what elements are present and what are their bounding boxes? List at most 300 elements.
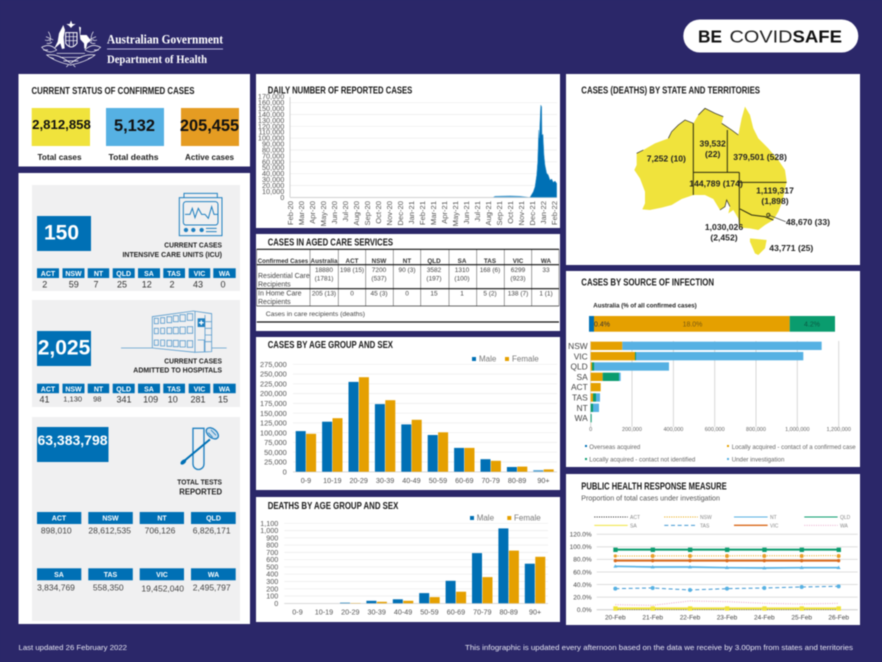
bar chart: cases by age: 60-69 xyxy=(455,476,473,485)
state values: tests: 2,495,797 xyxy=(193,583,231,593)
chart: daily cases: Dec-21 xyxy=(528,201,537,225)
heading: CURRENT STATUS OF CONFIRMED CASES xyxy=(32,86,195,97)
map labels: (1,898) xyxy=(761,196,789,206)
bar chart: cases by age: 40-49 xyxy=(402,476,421,485)
state header row: hospital: QLD xyxy=(116,386,131,393)
line chart: response: 21-Feb xyxy=(642,614,663,622)
bar chart: source by state: 200,000 xyxy=(622,427,642,433)
bar chart: deaths by age: 50-59 xyxy=(420,607,439,616)
panel: ICU, hospital and tests xyxy=(18,173,250,624)
bar chart: deaths by age: 20-29 xyxy=(341,607,359,616)
line chart: response: 120.0% xyxy=(570,532,592,539)
chart: daily cases: May-20 xyxy=(319,201,328,226)
table: aged care: 5 (2) xyxy=(483,290,497,297)
bar chart: cases by age: 30-39 xyxy=(376,476,394,485)
state values: hospital: 1,130 xyxy=(63,394,82,404)
state header rows: tests xyxy=(37,512,236,580)
bar chart: source by state: SA xyxy=(577,372,588,382)
chart: national stacked bar: 0.4% xyxy=(594,322,610,328)
table: aged care: (100) xyxy=(454,275,470,282)
legend: jurisdictions: NT xyxy=(770,515,777,521)
state values: tests xyxy=(37,525,231,594)
chart: daily cases: 0 xyxy=(280,193,284,202)
state header row: ICU: NT xyxy=(94,271,104,278)
bar chart: deaths by age: 70-79 xyxy=(473,607,491,616)
caption: tests xyxy=(177,480,222,496)
icon: hospital building xyxy=(121,311,227,352)
subheading: Proportion of total cases under investigation xyxy=(581,495,720,502)
bar chart: cases by age: 50-59 xyxy=(429,476,447,485)
line chart: response xyxy=(570,532,858,622)
heading: CASES BY SOURCE OF INFECTION xyxy=(581,277,714,288)
caption: hospital: ADMITTED TO HOSPITALS xyxy=(133,368,222,375)
legend: source: Under investigation xyxy=(732,457,785,464)
legend: jurisdictions xyxy=(594,515,851,529)
panel: aged care xyxy=(256,234,560,331)
state header row: hospital: NT xyxy=(94,386,104,393)
table: aged care: 33 xyxy=(542,267,550,274)
bar chart: deaths by age: 600 xyxy=(266,555,278,564)
state header row: ICU: ACT xyxy=(41,271,56,278)
bar chart: cases by age: 50,000 xyxy=(264,448,287,457)
state header rows: tests: VIC xyxy=(156,572,168,579)
line chart: response: 40.0% xyxy=(573,582,592,589)
state header row: hospital: TAS xyxy=(167,386,181,393)
state header rows: tests: ACT xyxy=(52,516,67,523)
state values: ICU: 0 xyxy=(220,280,226,290)
bar chart: cases by age: 80-89 xyxy=(508,476,526,485)
icon: ICU monitor xyxy=(179,193,222,236)
line chart: response: 25-Feb xyxy=(791,614,812,622)
state header rows: tests: SA xyxy=(54,572,64,579)
legend: source xyxy=(585,444,856,464)
bar chart: source by state: VIC xyxy=(574,351,588,361)
line chart: response: 20-Feb xyxy=(605,614,626,622)
chart: daily cases: Apr-20 xyxy=(308,201,317,224)
text: Department of Health: Department of Health xyxy=(107,52,207,66)
heading: CASES (DEATHS) BY STATE AND TERRITORIES xyxy=(581,86,760,97)
legend: Male xyxy=(477,513,495,522)
chart: daily cases: 110,000 xyxy=(258,128,284,137)
map: Australia xyxy=(634,107,787,255)
map labels: 1,030,026 xyxy=(705,222,743,232)
bar chart: cases by age: 0-9 xyxy=(301,476,311,485)
bar chart: deaths by age: 400 xyxy=(266,570,278,579)
bar chart: cases by age: 25,000 xyxy=(264,458,287,467)
table: aged care: 168 (6) xyxy=(480,267,500,274)
map labels: (22) xyxy=(705,149,720,159)
legend: jurisdictions: ACT xyxy=(630,515,640,521)
table: aged care: Residential Care xyxy=(258,273,310,280)
caption: ICU: INTENSIVE CARE UNITS (ICU) xyxy=(122,252,222,259)
table: aged care: 138 (7) xyxy=(508,290,528,297)
legend: source: Locally acquired - contact of a confirmed case xyxy=(732,444,856,451)
bar chart: deaths by age: 0 xyxy=(274,599,278,608)
stat: total cases: Total cases xyxy=(38,153,82,162)
stat: hospital cases: 2,025 xyxy=(38,336,91,359)
bar chart: deaths by age: 700 xyxy=(266,548,278,557)
table: aged care: SA xyxy=(458,258,467,265)
chart: daily cases: Jun-21 xyxy=(462,201,471,224)
stat: total tests xyxy=(37,427,108,462)
bar chart: deaths by age: 300 xyxy=(266,577,278,586)
stat: total deaths: Total deaths xyxy=(108,153,159,162)
state values: tests: 558,350 xyxy=(93,583,124,593)
heading: PUBLIC HEALTH RESPONSE MEASURE xyxy=(581,481,727,492)
chart: national stacked bar: 4.2% xyxy=(804,322,820,328)
state values: tests: 6,826,171 xyxy=(193,525,231,535)
legend: jurisdictions: TAS xyxy=(700,523,710,529)
stat: ICU cases: 150 xyxy=(44,222,79,244)
chart: daily cases: 120,000 xyxy=(258,122,284,131)
legend: source: Overseas acquired xyxy=(589,444,641,451)
footer: update note: This infographic is updated every afternoon based on the data we receive by 3.00pm from states and territories xyxy=(465,643,853,652)
panel: public health response xyxy=(566,474,860,625)
chart: daily cases: Aug-21 xyxy=(484,201,493,226)
panel: deaths by age xyxy=(256,497,560,622)
stat: active cases xyxy=(180,108,239,162)
table: aged care: VIC xyxy=(513,258,524,265)
state header row: hospital: VIC xyxy=(194,386,205,393)
chart: daily cases: Nov-21 xyxy=(517,201,526,225)
bar chart: source by state: NSW xyxy=(568,341,588,351)
table: aged care: NT xyxy=(403,258,411,265)
chart: national stacked bar xyxy=(589,316,835,332)
line chart: response: 23-Feb xyxy=(717,614,738,622)
chart: daily cases: 50,000 xyxy=(262,163,284,172)
chart: daily cases: 130,000 xyxy=(258,116,284,125)
map labels: 48,670 (33) xyxy=(786,217,830,227)
bar chart: cases by age: 200,000 xyxy=(260,389,287,398)
state values: tests: 898,010 xyxy=(41,525,72,535)
line chart: response: 24-Feb xyxy=(754,614,775,622)
heading: CASES BY AGE GROUP AND SEX xyxy=(268,340,393,351)
caption: tests: REPORTED xyxy=(179,487,222,496)
table: aged care: In Home Care xyxy=(258,290,302,298)
table: aged care: WA xyxy=(541,258,552,265)
table: aged care: (923) xyxy=(510,275,526,282)
subheading: Australia (% of all confirmed cases) xyxy=(593,302,697,309)
line chart: response: 0.0% xyxy=(577,607,592,614)
table: aged care: 1310 xyxy=(455,267,470,274)
legend xyxy=(470,513,541,522)
state values: ICU: 12 xyxy=(142,280,152,290)
line chart: response: 100.0% xyxy=(570,544,592,551)
caption: hospital: CURRENT CASES xyxy=(164,358,222,365)
badge: Be CovidSafe: BE xyxy=(698,26,722,46)
chart: daily cases: Jan-22 xyxy=(539,201,548,224)
chart: daily cases: 160,000 xyxy=(258,98,284,107)
state values: ICU xyxy=(42,280,226,290)
table: aged care: Recipients xyxy=(258,282,291,288)
bar chart: source by state: 800,000 xyxy=(746,427,766,433)
state header row: hospital: ACT xyxy=(41,386,56,393)
state header row: ICU: SA xyxy=(144,271,154,278)
state values: tests: 28,612,535 xyxy=(88,525,131,535)
bar chart: source by state: 400,000 xyxy=(663,427,683,433)
caption: tests: TOTAL TESTS xyxy=(177,480,222,487)
map labels: 1,119,317 xyxy=(756,185,794,195)
bar chart: cases by age: 0 xyxy=(283,467,287,476)
chart: daily cases: Jul-21 xyxy=(473,201,482,222)
card: ICU xyxy=(32,185,240,291)
state values: hospital: 281 xyxy=(190,394,206,404)
table: aged care: 198 (15) xyxy=(340,267,364,274)
stat: total tests: 63,383,798 xyxy=(37,432,108,448)
state header rows: tests: WA xyxy=(208,572,219,579)
table: aged care: NSW xyxy=(372,258,386,265)
bar chart: deaths by age xyxy=(260,519,548,616)
line chart: response: 26-Feb xyxy=(828,614,849,622)
state header rows: tests: QLD xyxy=(206,516,221,523)
bar chart: cases by age: 20-29 xyxy=(350,476,368,485)
chart: daily cases: 170,000 xyxy=(258,92,284,101)
state header row: ICU: WA xyxy=(219,271,230,278)
panel: cases by age xyxy=(256,337,560,490)
bar chart: source by state: 1,200,000 xyxy=(826,427,851,433)
bar chart: cases by age: 275,000 xyxy=(260,360,287,369)
stat: ICU cases xyxy=(37,216,91,251)
state values: ICU: 7 xyxy=(93,280,99,290)
table: aged care: (1781) xyxy=(315,275,333,282)
legend: jurisdictions: SA xyxy=(630,523,637,529)
legend xyxy=(472,355,539,364)
text: Australian Government: Australian Government xyxy=(107,32,224,46)
bar chart: source by state: 600,000 xyxy=(705,427,725,433)
stat: total deaths xyxy=(106,108,164,162)
heading: CASES IN AGED CARE SERVICES xyxy=(268,238,393,249)
legend: Male xyxy=(479,355,497,364)
legend: jurisdictions: VIC xyxy=(770,523,779,529)
state values: hospital: 41 xyxy=(39,394,50,404)
chart: national stacked bar: 18.0% xyxy=(683,322,702,328)
map labels: 39,532 xyxy=(700,138,726,148)
chart: daily cases: May-21 xyxy=(451,201,460,226)
state values: hospital: 15 xyxy=(218,394,228,404)
caption: ICU: CURRENT CASES xyxy=(164,243,222,250)
line chart: response: 22-Feb xyxy=(680,614,701,622)
bar chart: deaths by age: 60-69 xyxy=(447,607,465,616)
legend: source: Locally acquired - contact not identified xyxy=(589,457,696,464)
map labels: 43,771 (25) xyxy=(769,243,813,253)
badge: Be CovidSafe: COVID xyxy=(730,26,792,46)
state values: tests: 19,452,040 xyxy=(141,584,184,594)
chart: daily cases: Feb-22 xyxy=(550,201,559,225)
caption: hospital xyxy=(133,358,222,375)
bar chart: deaths by age: 30-39 xyxy=(368,607,386,616)
chart: daily cases: 40,000 xyxy=(262,169,284,178)
bar chart: source by state: ACT xyxy=(571,382,588,392)
chart: daily cases: Oct-21 xyxy=(506,201,515,224)
bar chart: cases by age: 100,000 xyxy=(260,428,287,437)
legend: jurisdictions: QLD xyxy=(840,515,851,521)
stat: total cases xyxy=(32,108,91,162)
state values: hospital: 10 xyxy=(168,394,178,404)
panel: source of infection xyxy=(566,271,860,467)
card: tests xyxy=(32,417,240,621)
stat: hospital cases xyxy=(37,331,91,366)
chart: daily cases: 150,000 xyxy=(258,104,284,113)
card: hospital xyxy=(32,300,240,407)
state values: hospital xyxy=(39,394,228,404)
bar chart: source by state xyxy=(568,341,851,433)
bar chart: cases by age: 90+ xyxy=(537,476,550,485)
state header row: ICU xyxy=(37,268,236,278)
chart: daily cases: Jul-20 xyxy=(341,201,350,222)
chart: daily cases xyxy=(258,92,559,226)
bar chart: deaths by age: 10-19 xyxy=(315,607,333,616)
chart: daily cases: 90,000 xyxy=(262,140,284,148)
table: aged care: Australia xyxy=(311,258,338,265)
table: aged care: 15 xyxy=(430,290,438,297)
icon: swab and test tube xyxy=(179,426,220,469)
bar chart: cases by age: 150,000 xyxy=(260,409,287,418)
table: aged care: Confirmed Cases xyxy=(258,258,309,265)
chart: daily cases: Feb-20 xyxy=(286,201,295,225)
bar chart: deaths by age: 90+ xyxy=(529,607,541,616)
legend: Female xyxy=(514,513,541,522)
badge: Be CovidSafe: SAFE xyxy=(792,26,842,46)
table: aged care: Recipients xyxy=(258,299,291,306)
map labels: 144,789 (174) xyxy=(689,178,743,188)
bar chart: source by state: NT xyxy=(577,403,588,413)
bar chart: deaths by age: 80-89 xyxy=(500,607,518,616)
chart: daily cases: Dec-20 xyxy=(396,201,405,225)
table: aged care: 6299 xyxy=(511,267,526,274)
bar chart: deaths by age: 900 xyxy=(266,533,278,542)
chart: daily cases: Aug-20 xyxy=(352,201,361,226)
chart: daily cases: 80,000 xyxy=(262,146,284,154)
bar chart: cases by age: 10-19 xyxy=(323,476,341,485)
state values: ICU: 2 xyxy=(169,280,175,290)
chart: daily cases: Sep-20 xyxy=(363,201,372,226)
stat: active cases: 205,455 xyxy=(180,117,239,135)
chart: daily cases: 100,000 xyxy=(258,134,284,143)
state values: tests: 706,126 xyxy=(145,525,176,535)
chart: daily cases: Mar-21 xyxy=(429,201,438,225)
state values: ICU: 2 xyxy=(42,280,47,290)
chart: daily cases: Apr-21 xyxy=(440,201,449,224)
state values: hospital: 98 xyxy=(93,394,101,404)
line chart: response: 20.0% xyxy=(573,594,592,601)
table: aged care: 0 xyxy=(350,290,354,297)
map labels: 379,501 (528) xyxy=(733,152,787,162)
bar chart: source by state: 0 xyxy=(589,427,592,433)
line chart: response: 80.0% xyxy=(573,557,592,564)
heading: DEATHS BY AGE GROUP AND SEX xyxy=(268,501,399,512)
table: aged care: (197) xyxy=(426,275,442,282)
line chart: response: 60.0% xyxy=(573,569,592,576)
chart: daily cases: Oct-20 xyxy=(374,201,383,224)
state values: ICU: 43 xyxy=(193,280,203,290)
panel: state map xyxy=(566,74,860,265)
logo: Australian Government crest and wordmark xyxy=(42,21,224,67)
state header row: ICU: VIC xyxy=(194,271,205,278)
table: aged care: QLD xyxy=(427,258,441,265)
chart: daily cases: 10,000 xyxy=(262,187,284,196)
bar chart: cases by age: 75,000 xyxy=(264,438,287,447)
state header row: hospital: NSW xyxy=(65,386,82,393)
state values: hospital: 341 xyxy=(116,394,132,404)
state values: ICU: 59 xyxy=(69,280,79,290)
heading: DAILY NUMBER OF REPORTED CASES xyxy=(268,85,413,96)
bar chart: cases by age: 125,000 xyxy=(260,418,287,428)
table: aged care xyxy=(257,249,559,322)
chart: daily cases: 60,000 xyxy=(262,157,284,166)
map labels xyxy=(647,138,830,253)
table: aged care: 3582 xyxy=(427,267,442,274)
bar chart: source by state: WA xyxy=(575,413,588,423)
state header row: ICU: NSW xyxy=(65,271,82,278)
state values: hospital: 109 xyxy=(143,394,158,404)
bar chart: deaths by age: 500 xyxy=(266,562,278,571)
footer: last updated: Last updated 26 February 2022 xyxy=(18,643,127,652)
caption: ICU xyxy=(122,243,222,259)
bar chart: deaths by age: 800 xyxy=(266,541,278,550)
table: aged care: 45 (3) xyxy=(371,290,387,297)
chart: daily cases: Mar-20 xyxy=(297,201,306,225)
state header row: ICU: QLD xyxy=(116,271,131,278)
legend: jurisdictions: WA xyxy=(840,523,849,529)
state header rows: tests: NSW xyxy=(102,516,119,523)
state header rows: tests: NT xyxy=(157,516,167,523)
chart: daily cases: Sep-21 xyxy=(495,201,504,226)
map labels: (2,452) xyxy=(710,233,738,243)
badge: Be CovidSafe xyxy=(683,20,858,52)
bar chart: deaths by age: 40-49 xyxy=(394,607,412,616)
table: aged care: 1 xyxy=(460,290,464,297)
bar chart: source by state: QLD xyxy=(570,362,588,372)
bar chart: cases by age: 70-79 xyxy=(482,476,500,485)
table: aged care: 0 xyxy=(405,290,409,297)
bar chart: source by state: 1,000,000 xyxy=(785,427,810,433)
chart: daily cases: 30,000 xyxy=(262,175,284,184)
table: aged care: TAS xyxy=(484,258,496,265)
legend: jurisdictions: NSW xyxy=(700,515,712,521)
state header row: ICU: TAS xyxy=(167,271,181,278)
stat: total deaths: 5,132 xyxy=(114,117,155,135)
bar chart: cases by age: 175,000 xyxy=(260,399,287,408)
bar chart: deaths by age: 1,000 xyxy=(260,526,278,535)
state values: ICU: 25 xyxy=(117,280,127,290)
table: aged care: 90 (3) xyxy=(399,267,415,274)
bar chart: deaths by age: 100 xyxy=(266,592,278,600)
state header row: hospital xyxy=(37,384,236,393)
state header row: hospital: WA xyxy=(219,386,230,393)
bar chart: cases by age: 225,000 xyxy=(260,379,287,388)
state header rows: tests: TAS xyxy=(104,572,118,579)
chart: daily cases: Nov-20 xyxy=(385,201,394,225)
table: aged care: 18880 xyxy=(315,267,333,274)
panel: current status xyxy=(18,74,250,166)
chart: daily cases: 20,000 xyxy=(262,181,284,190)
table: aged care: 7200 xyxy=(372,267,387,274)
state header row: hospital: SA xyxy=(144,386,154,393)
table: aged care: 205 (13) xyxy=(312,290,336,297)
bar chart: deaths by age: 200 xyxy=(266,584,278,593)
chart: daily cases: 140,000 xyxy=(258,110,284,119)
legend: Female xyxy=(512,355,539,364)
state values: tests: 3,834,769 xyxy=(37,583,75,593)
stat: active cases: Active cases xyxy=(185,153,235,162)
table: aged care: (537) xyxy=(371,275,387,282)
chart: daily cases: 70,000 xyxy=(262,151,284,160)
icon: coat of arms xyxy=(42,21,101,67)
bar chart: deaths by age: 1,100 xyxy=(260,519,278,528)
stat: total cases: 2,812,858 xyxy=(32,117,91,132)
bar chart: source by state: TAS xyxy=(572,392,588,402)
bar chart: cases by age xyxy=(260,360,557,485)
